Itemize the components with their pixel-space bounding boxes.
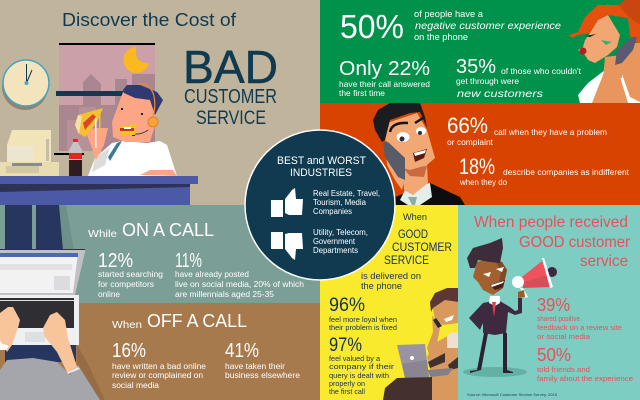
heading xyxy=(361,212,452,291)
heading: While xyxy=(88,229,117,240)
heading: SERVICE xyxy=(384,253,429,267)
heading xyxy=(474,214,631,270)
stat: 11%: are millennials aged 25-35 xyxy=(175,290,275,299)
stat: 50%: 50% xyxy=(340,8,404,45)
stat: 35%: new customers xyxy=(457,88,544,100)
heading: When xyxy=(403,212,427,222)
stat: 12% xyxy=(98,250,163,299)
worst industries: Utility, Telecom, xyxy=(313,228,368,237)
figure: person with laptop from above xyxy=(0,205,105,400)
stat: 22%: Only 22% xyxy=(339,58,430,80)
stat: 50%: 50% xyxy=(537,345,571,365)
stat: 41% xyxy=(225,340,301,380)
icon: thumbs up xyxy=(271,188,303,217)
stat: 16%: social media xyxy=(112,381,160,390)
stat: 66%: call when they have a problem xyxy=(494,128,607,137)
stat: 50%: told friends and xyxy=(537,365,590,374)
heading: CUSTOMER xyxy=(392,240,452,254)
panel: yellow good service xyxy=(320,205,458,400)
stat: 35% xyxy=(456,56,582,100)
stat: 35%: of those who couldn't xyxy=(501,67,582,76)
stat: 96% xyxy=(329,295,397,332)
figure: woman with laptop on phone xyxy=(383,288,458,400)
heading xyxy=(277,155,366,179)
stat: 96%: their problem is fixed xyxy=(329,323,397,332)
stat: 97%: company if their xyxy=(329,362,395,371)
stat: 11%: have already posted xyxy=(175,270,249,279)
heading: INDUSTRIES xyxy=(290,167,352,179)
stat: 16% xyxy=(112,340,207,390)
icon: thumbs down xyxy=(271,232,303,260)
figure: man eating pizza xyxy=(75,84,177,176)
stat: 50% xyxy=(340,8,561,45)
heading: service xyxy=(580,253,628,270)
stat: 11% xyxy=(175,250,304,299)
stat: 39%: shared positive xyxy=(537,314,580,323)
stat: 12%: 12% xyxy=(98,250,133,272)
stat: 12%: online xyxy=(98,290,121,299)
panel: best and worst industries circle xyxy=(245,130,395,280)
stat: 50% xyxy=(537,345,633,383)
stat: 11%: live on social media, 20% of which xyxy=(175,280,304,289)
heading: GOOD customer xyxy=(519,234,631,251)
heading: ON A CALL xyxy=(122,220,214,240)
figure: man with megaphone xyxy=(463,238,557,377)
stat: 96%: feel more loyal when xyxy=(329,315,397,324)
stat: 66%: 66% xyxy=(447,113,488,138)
title intro: Discover the Cost of xyxy=(62,10,237,30)
stat: 96%: 96% xyxy=(329,295,365,316)
figure: red-haired woman on phone xyxy=(569,0,640,103)
heading: OFF A CALL xyxy=(147,311,247,331)
best industries: Real Estate, Travel, xyxy=(313,189,380,198)
panel: on a call xyxy=(0,205,320,303)
stat: 50%: negative customer experience xyxy=(415,21,561,32)
stat: 97%: the first call xyxy=(329,387,365,396)
stat: 35%: 35% xyxy=(456,56,496,78)
desk xyxy=(0,176,198,205)
stat: 97%: 97% xyxy=(329,335,362,356)
stat: 66% xyxy=(447,113,607,147)
best industries: Companies xyxy=(313,207,352,216)
big title: BAD xyxy=(183,41,278,93)
stat: 18%: describe companies as indifferent xyxy=(503,168,630,177)
heading: When people received xyxy=(474,214,628,231)
stat: 50%: of people have a xyxy=(414,9,483,19)
stat: 39%: feedback on a review site xyxy=(537,323,622,332)
big title: SERVICE xyxy=(196,108,266,129)
stat: 97%: query is dealt with xyxy=(329,371,389,380)
source note: Source: Microsoft Customer Service Survey, 2015 xyxy=(467,392,558,397)
stat: 41%: business elsewhere xyxy=(225,371,301,380)
stat: 18%: 18% xyxy=(459,154,495,179)
stat: 41%: have taken their xyxy=(225,362,285,371)
panel: green stats xyxy=(320,0,640,103)
icon: wall clock xyxy=(2,60,49,110)
icon: cola bottle xyxy=(69,139,82,176)
stat: 18% xyxy=(459,154,630,187)
stat: 12%: for competitors xyxy=(98,280,154,289)
stat: 97%: feel valued by a xyxy=(329,354,381,363)
stat: 16%: review or complained on xyxy=(112,371,203,380)
stat: 22% xyxy=(339,58,430,98)
stat: 11%: 11% xyxy=(175,250,202,272)
stat: 12%: started searching xyxy=(98,270,163,279)
stat: 39% xyxy=(537,295,622,341)
worst industries: Government xyxy=(313,237,356,246)
stat: 22%: the first time xyxy=(339,88,385,98)
stat: 97% xyxy=(329,335,395,396)
worst industries: Departments xyxy=(313,246,358,255)
stat: 66%: or complaint xyxy=(447,138,494,147)
stat: 18%: when they do xyxy=(459,178,508,187)
stat: 41%: 41% xyxy=(225,340,259,362)
stat: 16%: have written a bad online xyxy=(112,362,207,371)
heading: GOOD xyxy=(398,227,428,241)
stat: 39%: or social media xyxy=(537,332,591,341)
stat: 50%: on the phone xyxy=(414,32,468,42)
heading: the phone xyxy=(361,281,402,291)
heading: BEST and WORST xyxy=(277,155,366,167)
window with city and moon xyxy=(54,43,155,155)
panel: orange stats xyxy=(320,103,640,205)
best industries xyxy=(313,189,380,216)
stat: 16%: 16% xyxy=(112,340,146,362)
best industries: Tourism, Media xyxy=(313,198,367,207)
worst industries xyxy=(313,228,368,255)
stat: 97%: properly on xyxy=(329,379,365,388)
icon: desktop computer xyxy=(0,130,59,176)
stat: 50%: family about the experience xyxy=(537,374,633,383)
panel: off a call xyxy=(0,303,320,400)
big title xyxy=(183,41,278,129)
stat: 35%: get through were xyxy=(456,77,520,86)
panel: beige office scene xyxy=(0,0,320,205)
panel: teal good service xyxy=(458,205,640,400)
stat: 22%: have their call answered xyxy=(339,79,430,89)
stat: 39%: 39% xyxy=(537,295,570,315)
figure: man on phone xyxy=(373,103,465,205)
big title: CUSTOMER xyxy=(184,86,277,108)
heading: is delivered on xyxy=(361,271,421,281)
heading: When xyxy=(112,320,142,331)
